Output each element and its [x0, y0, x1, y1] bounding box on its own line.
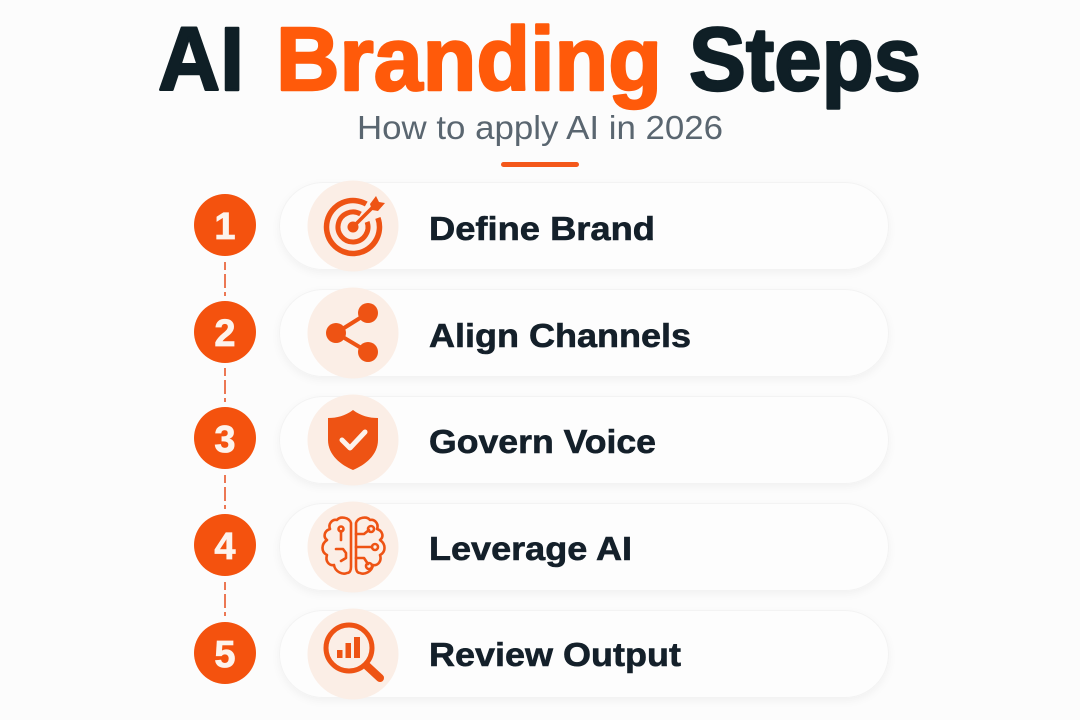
number badge 2: 2	[214, 313, 236, 355]
step 3: Govern Voice	[194, 394, 888, 486]
number badge 4	[194, 514, 256, 576]
subtitle: How to apply AI in 2026	[357, 109, 723, 146]
pill 4	[280, 504, 888, 590]
connector 3 to 4	[224, 475, 226, 510]
number badge 3: 3	[214, 419, 236, 461]
label: Review Output: Review Output	[429, 636, 681, 673]
number badge 5	[194, 622, 256, 684]
pill 2	[280, 290, 888, 376]
step 2: Align Channels	[194, 288, 888, 378]
label: Govern Voice: Govern Voice	[429, 423, 656, 460]
step 5: Review Output	[194, 608, 888, 700]
number badge 2	[194, 301, 256, 363]
accent bar	[501, 162, 579, 167]
icon: magnifier with bars	[308, 608, 398, 700]
step 1: Define Brand	[194, 180, 888, 272]
label: Leverage AI: Leverage AI	[429, 530, 632, 567]
number badge 1: 1	[214, 206, 236, 248]
icon: brain circuit	[308, 502, 398, 592]
label: Define Brand: Define Brand	[429, 210, 655, 247]
number badge 5: 5	[214, 634, 236, 676]
connector 4 to 5	[224, 582, 226, 617]
number badge 3	[194, 407, 256, 469]
number badge 1	[194, 194, 256, 256]
icon: share	[308, 288, 398, 378]
pill 3	[280, 396, 888, 484]
title: Branding	[276, 10, 662, 110]
pill 1	[280, 182, 888, 270]
step 4: Leverage AI	[194, 502, 888, 592]
icon: shield with check	[308, 394, 398, 486]
title: AI	[158, 10, 244, 110]
title: Steps	[689, 10, 921, 110]
title	[158, 10, 921, 110]
number badge 4: 4	[214, 526, 236, 568]
pill 5	[280, 610, 888, 698]
connector 2 to 3	[224, 368, 226, 402]
label: Align Channels: Align Channels	[429, 317, 691, 354]
icon: target	[308, 180, 398, 272]
connector 1 to 2	[224, 262, 226, 296]
